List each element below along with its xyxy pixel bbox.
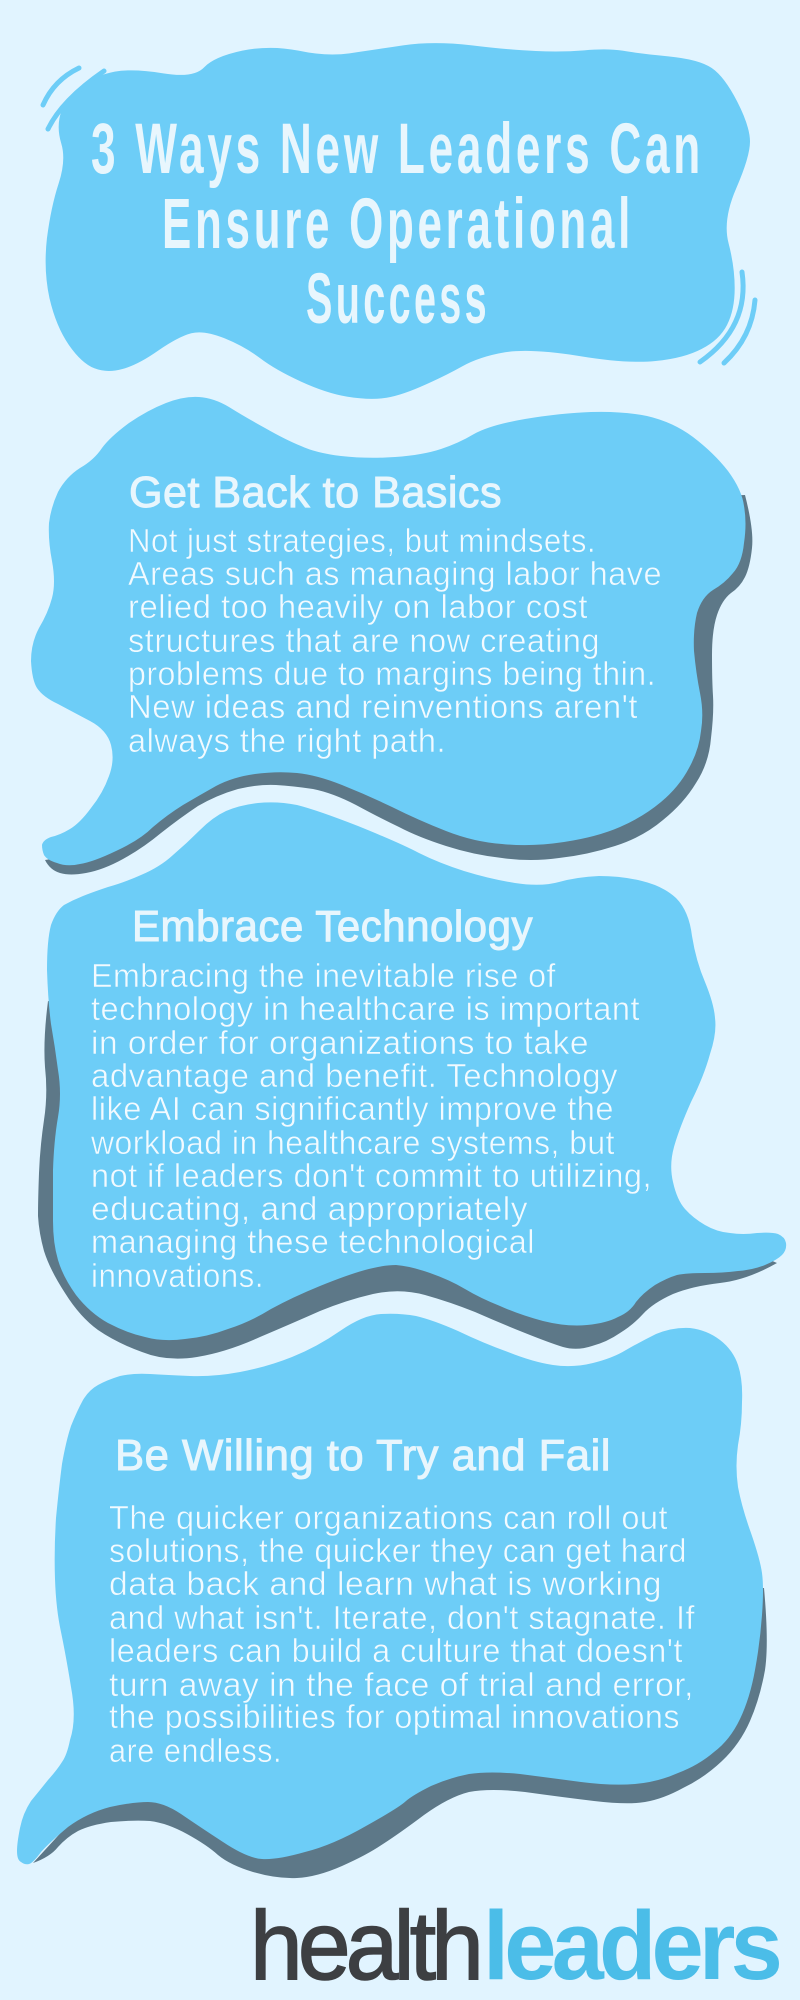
body text: Embracing the inevitable rise of xyxy=(91,957,556,994)
body text xyxy=(128,522,662,759)
body text: data back and learn what is working xyxy=(109,1565,662,1602)
body text: relied too heavily on labor cost xyxy=(128,588,588,625)
body text: the possibilities for optimal innovations xyxy=(109,1698,680,1735)
body text: not if leaders don't commit to utilizing, xyxy=(91,1157,652,1194)
panel: embrace technology xyxy=(38,802,786,1359)
accent arcs: top left xyxy=(43,68,104,129)
body text: educating, and appropriately xyxy=(91,1190,528,1227)
panel: be willing to try and fail xyxy=(17,1314,767,1878)
body text: The quicker organizations can roll out xyxy=(109,1499,668,1536)
accent arcs: bottom right xyxy=(700,272,755,363)
body text: and what isn't. Iterate, don't stagnate. If xyxy=(109,1599,695,1636)
title text: Success xyxy=(306,260,490,339)
logo: healthleaders: health xyxy=(250,1891,479,2000)
panel: title banner xyxy=(43,43,755,399)
heading: Embrace Technology xyxy=(132,902,533,951)
logo: healthleaders: leaders xyxy=(483,1891,779,2000)
panel blob xyxy=(31,397,746,865)
body text: Areas such as managing labor have xyxy=(128,555,662,592)
body text: problems due to margins being thin. xyxy=(128,655,656,692)
title blob xyxy=(46,43,750,399)
body text: structures that are now creating xyxy=(128,622,600,659)
body text: are endless. xyxy=(109,1732,282,1769)
logo: healthleaders xyxy=(250,1891,779,2000)
title text xyxy=(91,110,704,339)
panel: get back to basics xyxy=(31,397,752,874)
body text: workload in healthcare systems, but xyxy=(90,1124,615,1161)
panel shadow xyxy=(33,1588,767,1878)
body text: in order for organizations to take xyxy=(91,1024,589,1061)
body text: technology in healthcare is important xyxy=(91,990,640,1027)
panel shadow xyxy=(45,495,752,874)
body text: leaders can build a culture that doesn't xyxy=(109,1632,683,1669)
body text: like AI can significantly improve the xyxy=(91,1090,614,1127)
body text: advantage and benefit. Technology xyxy=(91,1057,618,1094)
panel blob xyxy=(47,802,786,1340)
body text: innovations. xyxy=(91,1257,264,1294)
body text: solutions, the quicker they can get hard xyxy=(109,1532,687,1569)
body text: managing these technological xyxy=(91,1223,535,1260)
body text: Not just strategies, but mindsets. xyxy=(128,522,596,559)
body text xyxy=(109,1499,695,1769)
body text xyxy=(90,957,652,1294)
panel shadow xyxy=(38,1001,777,1359)
heading: Get Back to Basics xyxy=(129,468,502,517)
panel blob xyxy=(17,1314,763,1864)
body text: New ideas and reinventions aren't xyxy=(128,688,638,725)
heading: Be Willing to Try and Fail xyxy=(115,1431,611,1480)
body text: turn away in the face of trial and error, xyxy=(109,1666,694,1703)
body text: always the right path. xyxy=(128,722,446,759)
